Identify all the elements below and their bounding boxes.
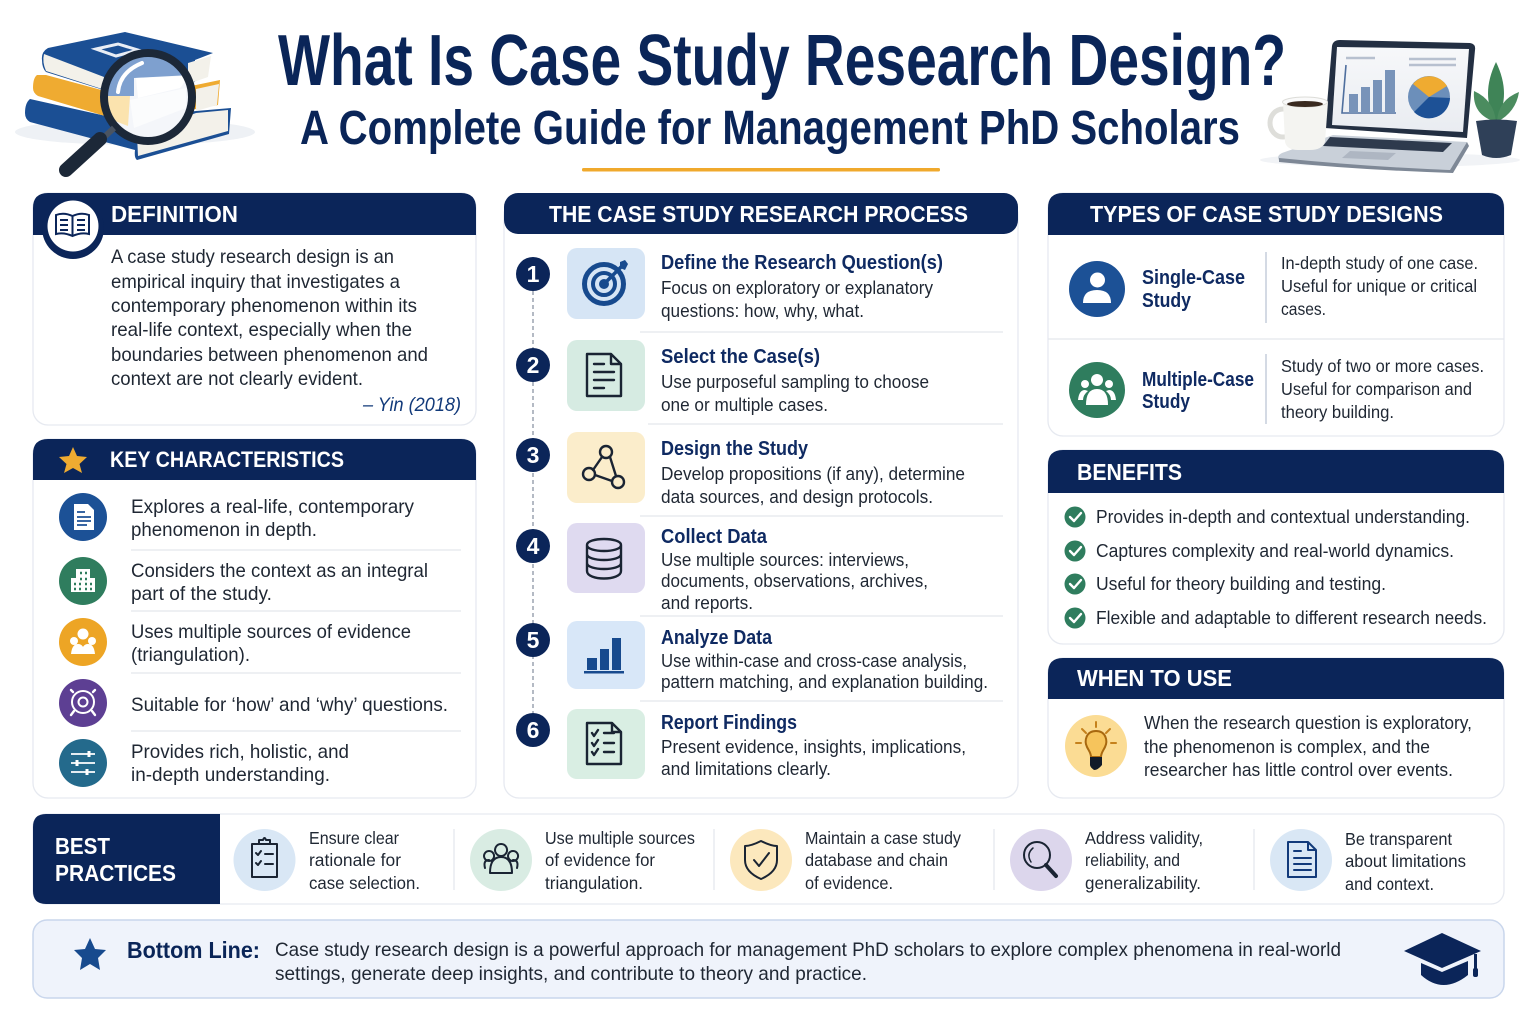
multiple-case description: Study of two or more cases. xyxy=(1281,356,1484,376)
definition header bar xyxy=(33,193,476,235)
step 1: Define the Research Question(s) xyxy=(661,252,943,274)
practice 1: clear rationale xyxy=(234,828,420,893)
practice 4: validity: generalizability. xyxy=(1085,873,1201,893)
benefit 1: Provides in-depth and contextual understanding. xyxy=(1096,507,1470,527)
step 3 xyxy=(516,432,965,507)
when to use text: researcher has little control over events. xyxy=(1144,760,1453,780)
practice 4: validity: reliability, and xyxy=(1085,850,1180,870)
characteristic 4: Suitable for ‘how’ and ‘why’ questions. xyxy=(131,694,448,716)
step 2: Use purposeful sampling to choose xyxy=(661,372,929,392)
illustration: laptop, coffee cup and plant xyxy=(1260,40,1520,173)
step 1 xyxy=(516,248,943,321)
panel: when to use xyxy=(1048,658,1504,798)
best practices label xyxy=(33,814,220,904)
definition text: contemporary phenomenon within its xyxy=(111,295,417,317)
step 1: 1 xyxy=(527,261,540,287)
panel: bottom line xyxy=(33,920,1504,998)
single-case description: cases. xyxy=(1281,299,1326,319)
characteristic 1: Explores a real-life, contemporary xyxy=(131,496,414,518)
practice 4: validity: Address validity, xyxy=(1085,828,1203,848)
single-case label: Single-Case xyxy=(1142,267,1245,289)
practice 2: multiple sources: triangulation. xyxy=(545,873,643,893)
coffee cup xyxy=(1270,109,1296,137)
step 4: documents, observations, archives, xyxy=(661,571,928,591)
when to use header bar xyxy=(1048,658,1504,699)
definition text: context are not clearly evident. xyxy=(111,368,363,390)
practice 2: multiple sources xyxy=(470,828,695,893)
step 2: 2 xyxy=(527,352,539,378)
single-case label xyxy=(1142,267,1245,312)
step 2 xyxy=(516,340,929,415)
icon: target lens xyxy=(59,679,107,727)
benefit 3: Useful for theory building and testing. xyxy=(1096,574,1386,594)
icon: group of people xyxy=(1069,362,1125,418)
bottom line text: Case study research design is a powerful approach for management PhD scholars to explore complex phenomena in real-world xyxy=(275,939,1341,961)
title underline xyxy=(582,168,940,172)
step 3: Design the Study xyxy=(661,438,809,460)
multiple-case description: Useful for comparison and xyxy=(1281,379,1472,399)
practice 2: multiple sources: Use multiple sources xyxy=(545,828,695,848)
practice 5: transparency: about limitations xyxy=(1345,851,1466,871)
icon: star xyxy=(59,447,87,473)
bottom line text: settings, generate deep insights, and contribute to theory and practice. xyxy=(275,963,867,985)
step 6: and limitations clearly. xyxy=(661,759,831,779)
laptop lid xyxy=(1325,40,1475,138)
plant xyxy=(1488,62,1504,122)
types header bar xyxy=(1048,193,1504,235)
benefit 4: Flexible and adaptable to different research needs. xyxy=(1096,608,1487,628)
practice 4: validity xyxy=(1010,828,1203,893)
benefits heading: BENEFITS xyxy=(1077,459,1182,485)
multiple-case label: Multiple-Case xyxy=(1142,369,1254,391)
multiple-case description: theory building. xyxy=(1281,402,1394,422)
practice 1: clear rationale: rationale for xyxy=(309,850,401,870)
step 4: Use multiple sources: interviews, xyxy=(661,550,909,570)
icon: document xyxy=(59,493,107,541)
step 5 xyxy=(516,621,988,692)
characteristic 5: in-depth understanding. xyxy=(131,764,330,786)
practice 3: case study database: Maintain a case study xyxy=(805,828,961,848)
characteristic 2: part of the study. xyxy=(131,583,272,605)
panel: best practices xyxy=(33,814,1504,904)
laptop base xyxy=(1278,135,1467,170)
characteristic 2 xyxy=(131,560,428,605)
practice 3: case study database: of evidence. xyxy=(805,873,893,893)
definition text xyxy=(111,246,428,390)
single-case description: Useful for unique or critical xyxy=(1281,276,1477,296)
panel: types of case study designs xyxy=(1048,193,1504,436)
step 6 xyxy=(516,709,966,779)
step 4: Collect Data xyxy=(661,526,768,548)
icon: blue star xyxy=(74,938,106,970)
characteristic 5 xyxy=(131,741,349,786)
definition text: boundaries between phenomenon and xyxy=(111,344,428,366)
best practices label: PRACTICES xyxy=(55,860,176,886)
definition text: A case study research design is an xyxy=(111,246,394,268)
practice 1: clear rationale: Ensure clear xyxy=(309,828,399,848)
illustration: books and magnifying glass xyxy=(15,32,255,170)
timeline connector xyxy=(532,291,534,713)
single-case description: In-depth study of one case. xyxy=(1281,253,1478,273)
icon: single person xyxy=(1069,261,1125,317)
key characteristics header bar xyxy=(33,439,476,480)
step 5: Analyze Data xyxy=(661,627,773,649)
process header bar xyxy=(504,193,1018,234)
panel: benefits xyxy=(1048,450,1504,644)
step 6: 6 xyxy=(527,717,539,743)
top book xyxy=(42,32,213,92)
multiple-case label: Study xyxy=(1142,391,1191,413)
icon: sliders xyxy=(59,739,107,787)
step 2: one or multiple cases. xyxy=(661,395,828,415)
definition text: empirical inquiry that investigates a xyxy=(111,271,400,293)
step 2: Select the Case(s) xyxy=(661,346,820,368)
step 6: Report Findings xyxy=(661,712,797,734)
characteristic 3 xyxy=(131,621,411,666)
bottom line text xyxy=(275,939,1341,985)
practice 5: transparency: Be transparent xyxy=(1345,829,1452,849)
step 5: pattern matching, and explanation building. xyxy=(661,672,988,692)
when to use text: the phenomenon is complex, and the xyxy=(1144,737,1430,757)
practice 2: multiple sources: of evidence for xyxy=(545,850,655,870)
step 5: Use within-case and cross-case analysis, xyxy=(661,651,967,671)
step 1: questions: how, why, what. xyxy=(661,301,864,321)
practice 3: case study database xyxy=(730,828,961,893)
step 5: 5 xyxy=(527,627,540,653)
subtitle: A Complete Guide for Management PhD Scholars xyxy=(300,102,1240,155)
multiple-case label xyxy=(1142,369,1254,413)
magnifier handle xyxy=(102,128,114,139)
step 4 xyxy=(516,523,928,613)
types heading: TYPES OF CASE STUDY DESIGNS xyxy=(1090,201,1443,227)
icon: building xyxy=(59,557,107,605)
icon: open book badge xyxy=(42,197,104,259)
multiple-case description xyxy=(1281,356,1484,422)
step 4: 4 xyxy=(527,533,540,559)
characteristic 3: Uses multiple sources of evidence xyxy=(131,621,411,643)
middle book xyxy=(33,75,220,122)
characteristic 1 xyxy=(131,496,414,541)
when to use heading: WHEN TO USE xyxy=(1077,665,1232,691)
panel: definition xyxy=(33,193,476,425)
benefits header bar xyxy=(1048,450,1504,493)
magnifier lens xyxy=(108,57,188,137)
process heading: THE CASE STUDY RESEARCH PROCESS xyxy=(549,201,968,227)
step 6: Present evidence, insights, implications, xyxy=(661,737,966,757)
characteristic 5: Provides rich, holistic, and xyxy=(131,741,349,763)
practice 3: case study database: database and chain xyxy=(805,850,948,870)
step 3: Develop propositions (if any), determine xyxy=(661,464,965,484)
definition text: real-life context, especially when the xyxy=(111,319,412,341)
step 3: data sources, and design protocols. xyxy=(661,487,933,507)
bottom book xyxy=(25,99,231,160)
characteristic 2: Considers the context as an integral xyxy=(131,560,428,582)
icon: graduation cap xyxy=(1404,933,1481,985)
benefit 2: Captures complexity and real-world dynamics. xyxy=(1096,541,1454,561)
single-case label: Study xyxy=(1142,290,1192,312)
step 4: and reports. xyxy=(661,593,753,613)
best practices label: BEST xyxy=(55,833,110,859)
step 3: 3 xyxy=(527,442,539,468)
key characteristics heading: KEY CHARACTERISTICS xyxy=(110,447,344,472)
characteristic 1: phenomenon in depth. xyxy=(131,519,317,541)
step 1: Focus on exploratory or explanatory xyxy=(661,278,933,298)
panel: key characteristics xyxy=(33,439,476,798)
characteristic 3: (triangulation). xyxy=(131,644,250,666)
practice 1: clear rationale: case selection. xyxy=(309,873,420,893)
citation: – Yin (2018) xyxy=(362,394,461,416)
when to use text: When the research question is exploratory, xyxy=(1144,713,1472,733)
practice 5: transparency xyxy=(1270,829,1466,894)
bottom line label: Bottom Line: xyxy=(127,937,260,963)
icon: people xyxy=(59,618,107,666)
panel: research process xyxy=(504,193,1018,798)
single-case description xyxy=(1281,253,1478,319)
definition heading: DEFINITION xyxy=(111,201,238,227)
when to use text xyxy=(1144,713,1472,780)
icon: light bulb xyxy=(1065,715,1127,777)
practice 5: transparency: and context. xyxy=(1345,874,1434,894)
